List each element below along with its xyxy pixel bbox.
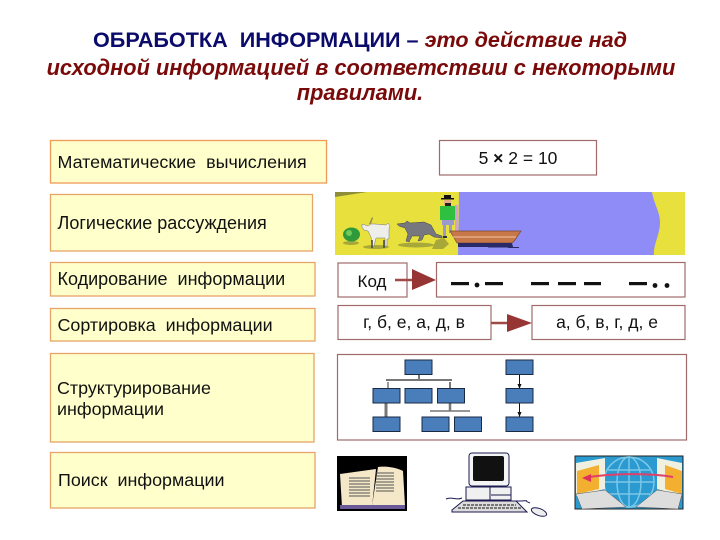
tree diagram [373, 360, 482, 432]
arrow: sorting [491, 314, 532, 332]
unsorted letters box [338, 306, 491, 340]
code box [338, 263, 407, 297]
sorted letters box: а, б, в, г, д, е [556, 312, 658, 332]
title: исходной информацией в соответствии с некоторыми [47, 55, 675, 80]
arrow: code to Morse [395, 269, 436, 290]
panel: logical reasoning: Логические рассуждения [58, 213, 267, 233]
panel: logical reasoning [50, 194, 312, 251]
panel: structuring information: Структурирование [57, 378, 211, 398]
title: ОБРАБОТКА ИНФОРМАЦИИ – это действие над [93, 27, 627, 52]
river crossing picture [335, 192, 685, 255]
panel: searching information [50, 452, 315, 508]
icon: desktop computer [446, 453, 548, 518]
panel: sorting information: Сортировка информации [58, 315, 273, 335]
farmer [432, 195, 458, 249]
unsorted letters box: г, б, е, а, д, в [363, 312, 465, 332]
panel: structuring information [50, 354, 314, 442]
panel: encoding information [50, 262, 315, 296]
panel: encoding information: Кодирование информации [58, 269, 285, 289]
title: правилами. [297, 80, 423, 105]
icon: open book [337, 456, 407, 511]
formula box [440, 140, 596, 175]
structure panel [338, 354, 686, 440]
Morse code box [436, 262, 685, 297]
icon: networked laptops [575, 456, 683, 509]
linear diagram [506, 360, 533, 432]
formula box: 5 × 2 = 10 [479, 148, 558, 168]
panel: mathematical calculations [50, 140, 326, 183]
panel: sorting information [50, 308, 315, 341]
goat [362, 217, 390, 249]
title [47, 27, 675, 105]
panel: searching information: Поиск информации [58, 470, 224, 490]
panel: mathematical calculations: Математические вычисления [58, 152, 307, 172]
code box: Код [358, 272, 387, 291]
wolf [397, 221, 442, 248]
sorted letters box [532, 306, 685, 340]
cabbage [343, 228, 360, 245]
panel: structuring information: информации [57, 399, 164, 419]
raft [450, 231, 521, 248]
